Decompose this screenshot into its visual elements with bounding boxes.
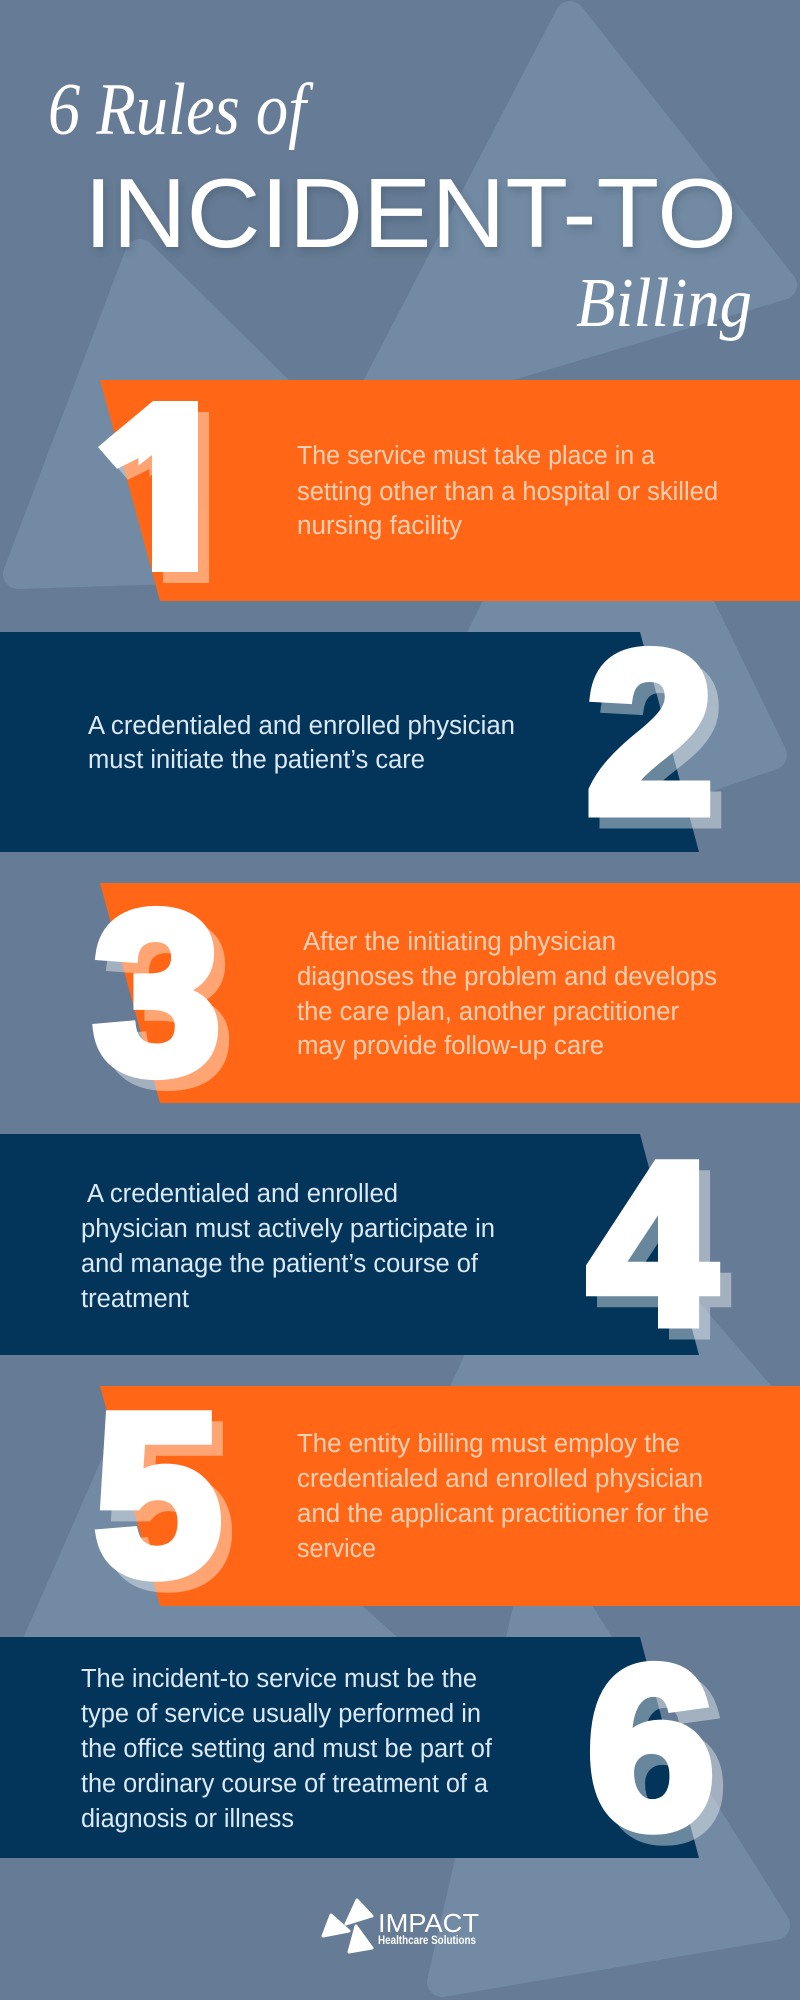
panel: rule 5 [94, 1366, 800, 1634]
panel: rule 2 [0, 604, 725, 872]
title line: Billing: Billing [576, 265, 752, 342]
number 6 shadow: 6 [598, 1630, 726, 1887]
panel: rule 4 [0, 1115, 727, 1383]
rule 2 text: must initiate the patient’s care [88, 746, 425, 774]
rule 6 text: type of service usually performed in [81, 1700, 481, 1728]
rule 5 text: credentialed and enrolled physician [297, 1465, 703, 1493]
rule 4 text: A credentialed and enrolled [87, 1180, 398, 1208]
rule 4 text: treatment [81, 1285, 189, 1313]
rule 1 text [297, 442, 718, 540]
rule 1 text: The service must take place in a [297, 442, 656, 470]
rule 6 text: the office setting and must be part of [81, 1735, 493, 1763]
rule 5 text: The entity billing must employ the [297, 1430, 680, 1458]
number 2: 2 [586, 604, 714, 861]
rule 6 text: diagnosis or illness [81, 1805, 294, 1833]
rule 1 text: setting other than a hospital or skilled [297, 478, 718, 506]
rule 3 text: may provide follow-up care [297, 1032, 604, 1060]
number 3 shadow: 3 [104, 875, 232, 1132]
rule 4 text: and manage the patient’s course of [81, 1250, 479, 1278]
panel: rule 1 [98, 380, 800, 601]
rule 6 text: The incident-to service must be the [81, 1665, 477, 1693]
rule 1 text: nursing facility [297, 512, 462, 540]
number 6: 6 [587, 1619, 715, 1876]
rule 5 text: and the applicant practitioner for the [297, 1500, 709, 1528]
logo tagline: Healthcare Solutions [378, 1933, 476, 1947]
rule 6 text: the ordinary course of treatment of a [81, 1770, 489, 1798]
rule 2 text [88, 712, 515, 774]
number 1 shadow: 1 [99, 372, 255, 624]
icon: three triangles [323, 1900, 372, 1952]
panel: rule 3 [93, 864, 800, 1132]
logo wordmark: IMPACT [378, 1908, 479, 1938]
number 5: 5 [94, 1366, 222, 1623]
rule 6 text [81, 1665, 493, 1833]
logo: Impact Healthcare Solutions [323, 1900, 479, 1952]
number 4 shadow: 4 [599, 1126, 727, 1383]
rule 3 text: the care plan, another practitioner [297, 998, 679, 1026]
rule 5 text: service [297, 1535, 376, 1563]
number 1: 1 [88, 361, 244, 613]
rule 3 text [297, 928, 717, 1060]
number 3: 3 [93, 864, 221, 1121]
title line: 6 Rules of: 6 Rules of [48, 69, 314, 151]
rule 2 text: A credentialed and enrolled physician [88, 712, 515, 740]
rule 4 text [81, 1180, 495, 1313]
title [48, 69, 752, 342]
number 4: 4 [588, 1115, 716, 1372]
rule 5 text [297, 1430, 709, 1563]
title line: INCIDENT-TO: INCIDENT-TO [84, 158, 737, 268]
number 2 shadow: 2 [597, 615, 725, 872]
rule 4 text: physician must actively participate in [81, 1215, 495, 1243]
rule 3 text: diagnoses the problem and develops [297, 963, 717, 991]
number 5 shadow: 5 [105, 1377, 233, 1634]
rule 3 text: After the initiating physician [303, 928, 616, 956]
panel: rule 6 [0, 1619, 726, 1887]
